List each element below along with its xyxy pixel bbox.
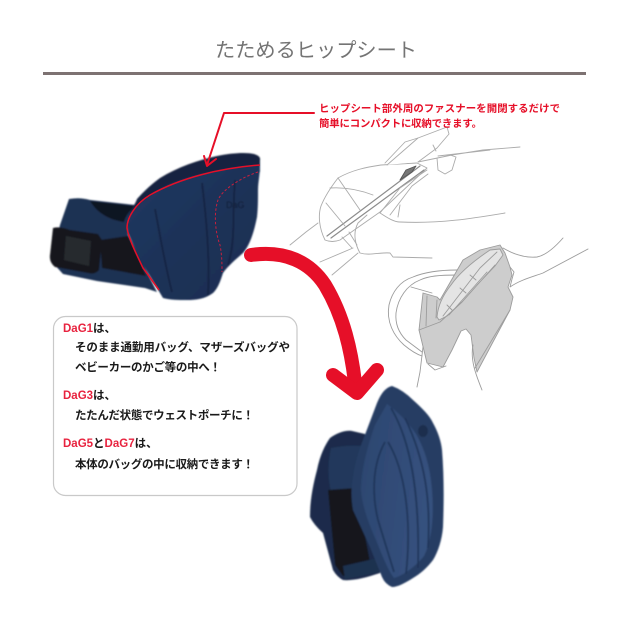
DaG1 note: ベビーカーのかご等の中へ！ [75, 360, 221, 374]
DaG3 note: たたんだ状態でウェストポーチに！ [75, 408, 254, 422]
curved red arrow [251, 254, 377, 393]
title underline [43, 72, 586, 75]
folded back pouch [310, 431, 380, 580]
seat back rim [127, 153, 260, 219]
upper flap [387, 127, 449, 165]
waist belt [52, 198, 157, 292]
zipper outline in red [127, 165, 260, 290]
DaG3 note: DaG3は、 [63, 389, 116, 402]
product photo: hip seat with zipper [50, 153, 260, 300]
quilted channels [374, 408, 429, 574]
DaG1 note [63, 322, 290, 374]
buckle [50, 227, 102, 274]
upper hand [418, 147, 520, 174]
lower hand [417, 345, 482, 390]
product photo: folded hip seat [310, 386, 444, 587]
DaG1 note: DaG1は、 [63, 322, 116, 335]
illustration: opening the zipper [290, 127, 520, 275]
callout text [319, 102, 560, 130]
DaG5 and DaG7 note: 本体のバッグの中に収納できます！ [75, 457, 254, 471]
DaG3 note [63, 389, 254, 422]
panel quilting [155, 180, 235, 295]
DaG5 and DaG7 note: DaG5とDaG7は、 [63, 437, 158, 450]
DaG1 note: そのまま通勤用バッグ、マザーズバッグや [75, 340, 290, 354]
logo mark: DaG [226, 200, 245, 210]
callout text: 簡単にコンパクトに収納できます。 [319, 117, 482, 130]
pouch fold [328, 446, 362, 492]
callout leader with arrow [204, 113, 314, 166]
seat panel [127, 165, 260, 300]
lower body of seat strap [380, 170, 428, 217]
right hand [503, 238, 588, 287]
lower hand [355, 215, 432, 258]
folded seat grey body [419, 245, 513, 372]
folded front panel [352, 386, 444, 587]
stroller ring [388, 270, 457, 356]
illustration: folding the seat [388, 238, 588, 390]
stroller frame [290, 223, 358, 275]
webbing strap [100, 236, 146, 276]
callout text: ヒップシート部外周のファスナーを開閉するだけで [319, 102, 560, 115]
DaG5 and DaG7 note [63, 437, 254, 471]
info box [54, 316, 297, 496]
seat outline [319, 163, 427, 242]
title: たためるヒップシート [215, 40, 417, 62]
stitched path [215, 172, 258, 272]
